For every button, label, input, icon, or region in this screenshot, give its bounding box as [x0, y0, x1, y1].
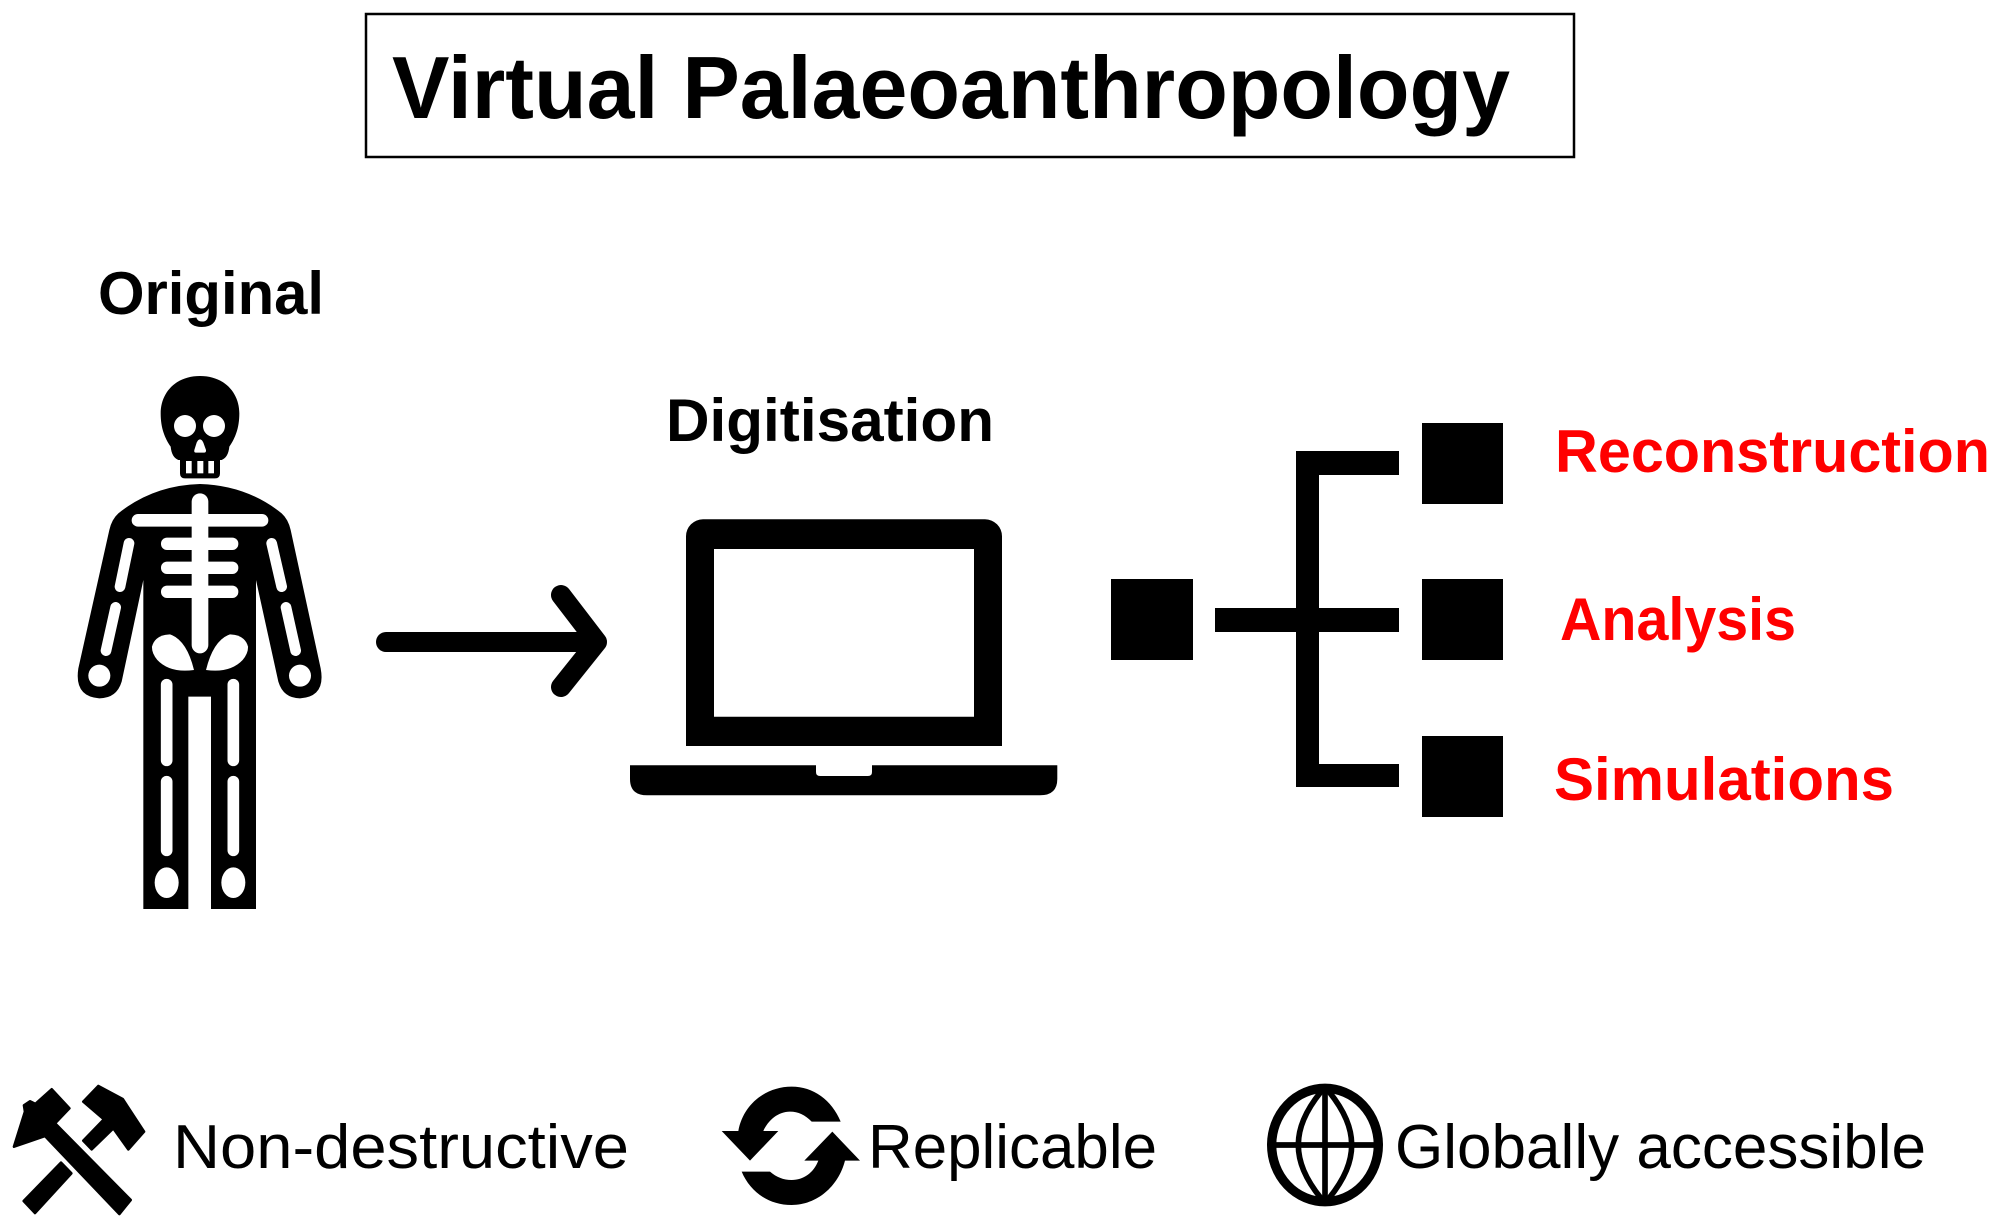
- title: Virtual Palaeoanthropology: [392, 38, 1510, 137]
- label: Analysis: Analysis: [1560, 586, 1796, 653]
- heading: Digitisation: Digitisation: [666, 387, 994, 454]
- icon: crossed hammers: [14, 1086, 144, 1214]
- body: [78, 484, 322, 909]
- text: Globally accessible: Globally accessible: [1395, 1113, 1926, 1182]
- label: Reconstruction: Reconstruction: [1555, 418, 1990, 485]
- label: Simulations: Simulations: [1554, 746, 1894, 813]
- icon: skeleton figure: [78, 376, 322, 909]
- text: Replicable: Replicable: [868, 1113, 1157, 1182]
- skull: [161, 376, 239, 478]
- title: [366, 14, 1574, 157]
- icon: globe: [1272, 1087, 1378, 1202]
- icon: refresh arrows: [722, 1087, 860, 1205]
- arrow: [386, 595, 597, 687]
- text: Non-destructive: Non-destructive: [173, 1113, 629, 1182]
- heading: Original: Original: [98, 260, 324, 327]
- hierarchy diagram: [1111, 423, 1503, 817]
- icon: laptop: [630, 519, 1057, 795]
